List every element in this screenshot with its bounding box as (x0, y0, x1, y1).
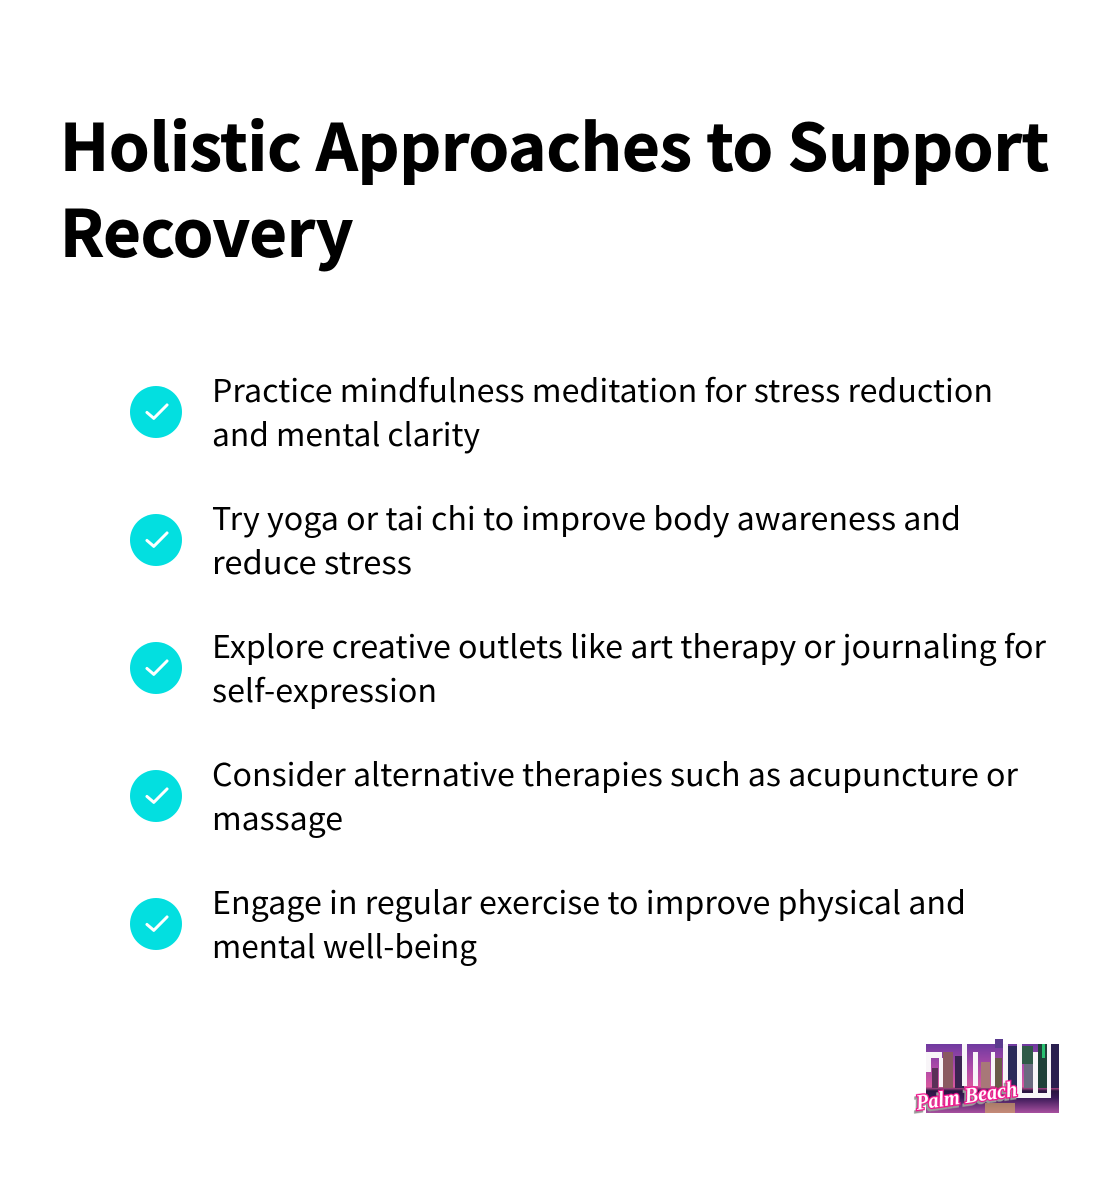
item 5: exercise: Engage in regular exercise to improve physical and (212, 878, 966, 924)
item 3: creative outlets (130, 622, 1047, 712)
item 5: exercise (130, 878, 966, 968)
logo letter cut-outs (926, 1044, 1051, 1098)
checklist (130, 366, 1047, 968)
item 4: alternative therapies (130, 750, 1019, 840)
item 4: alternative therapies: massage (212, 794, 343, 840)
title: Holistic Approaches to Support (60, 98, 1049, 190)
item 5: exercise: mental well-being (212, 922, 477, 968)
item 2: yoga: reduce stress (212, 538, 412, 584)
logo script text: Palm Beach (913, 1076, 1019, 1115)
title: Recovery (60, 184, 353, 276)
title (60, 98, 1049, 276)
item 4: alternative therapies: Consider alternative therapies such as acupuncture or (212, 750, 1019, 796)
item 2: yoga (130, 494, 961, 584)
logo: Amity Palm Beach (913, 1039, 1059, 1115)
item 1: mindfulness: Practice mindfulness meditation for stress reduction (212, 366, 993, 412)
item 3: creative outlets: Explore creative outlets like art therapy or journaling for (212, 622, 1047, 668)
item 2: yoga: Try yoga or tai chi to improve body awareness and (212, 494, 961, 540)
item 1: mindfulness (130, 366, 993, 456)
item 1: mindfulness: and mental clarity (212, 410, 480, 456)
item 3: creative outlets: self-expression (212, 666, 437, 712)
